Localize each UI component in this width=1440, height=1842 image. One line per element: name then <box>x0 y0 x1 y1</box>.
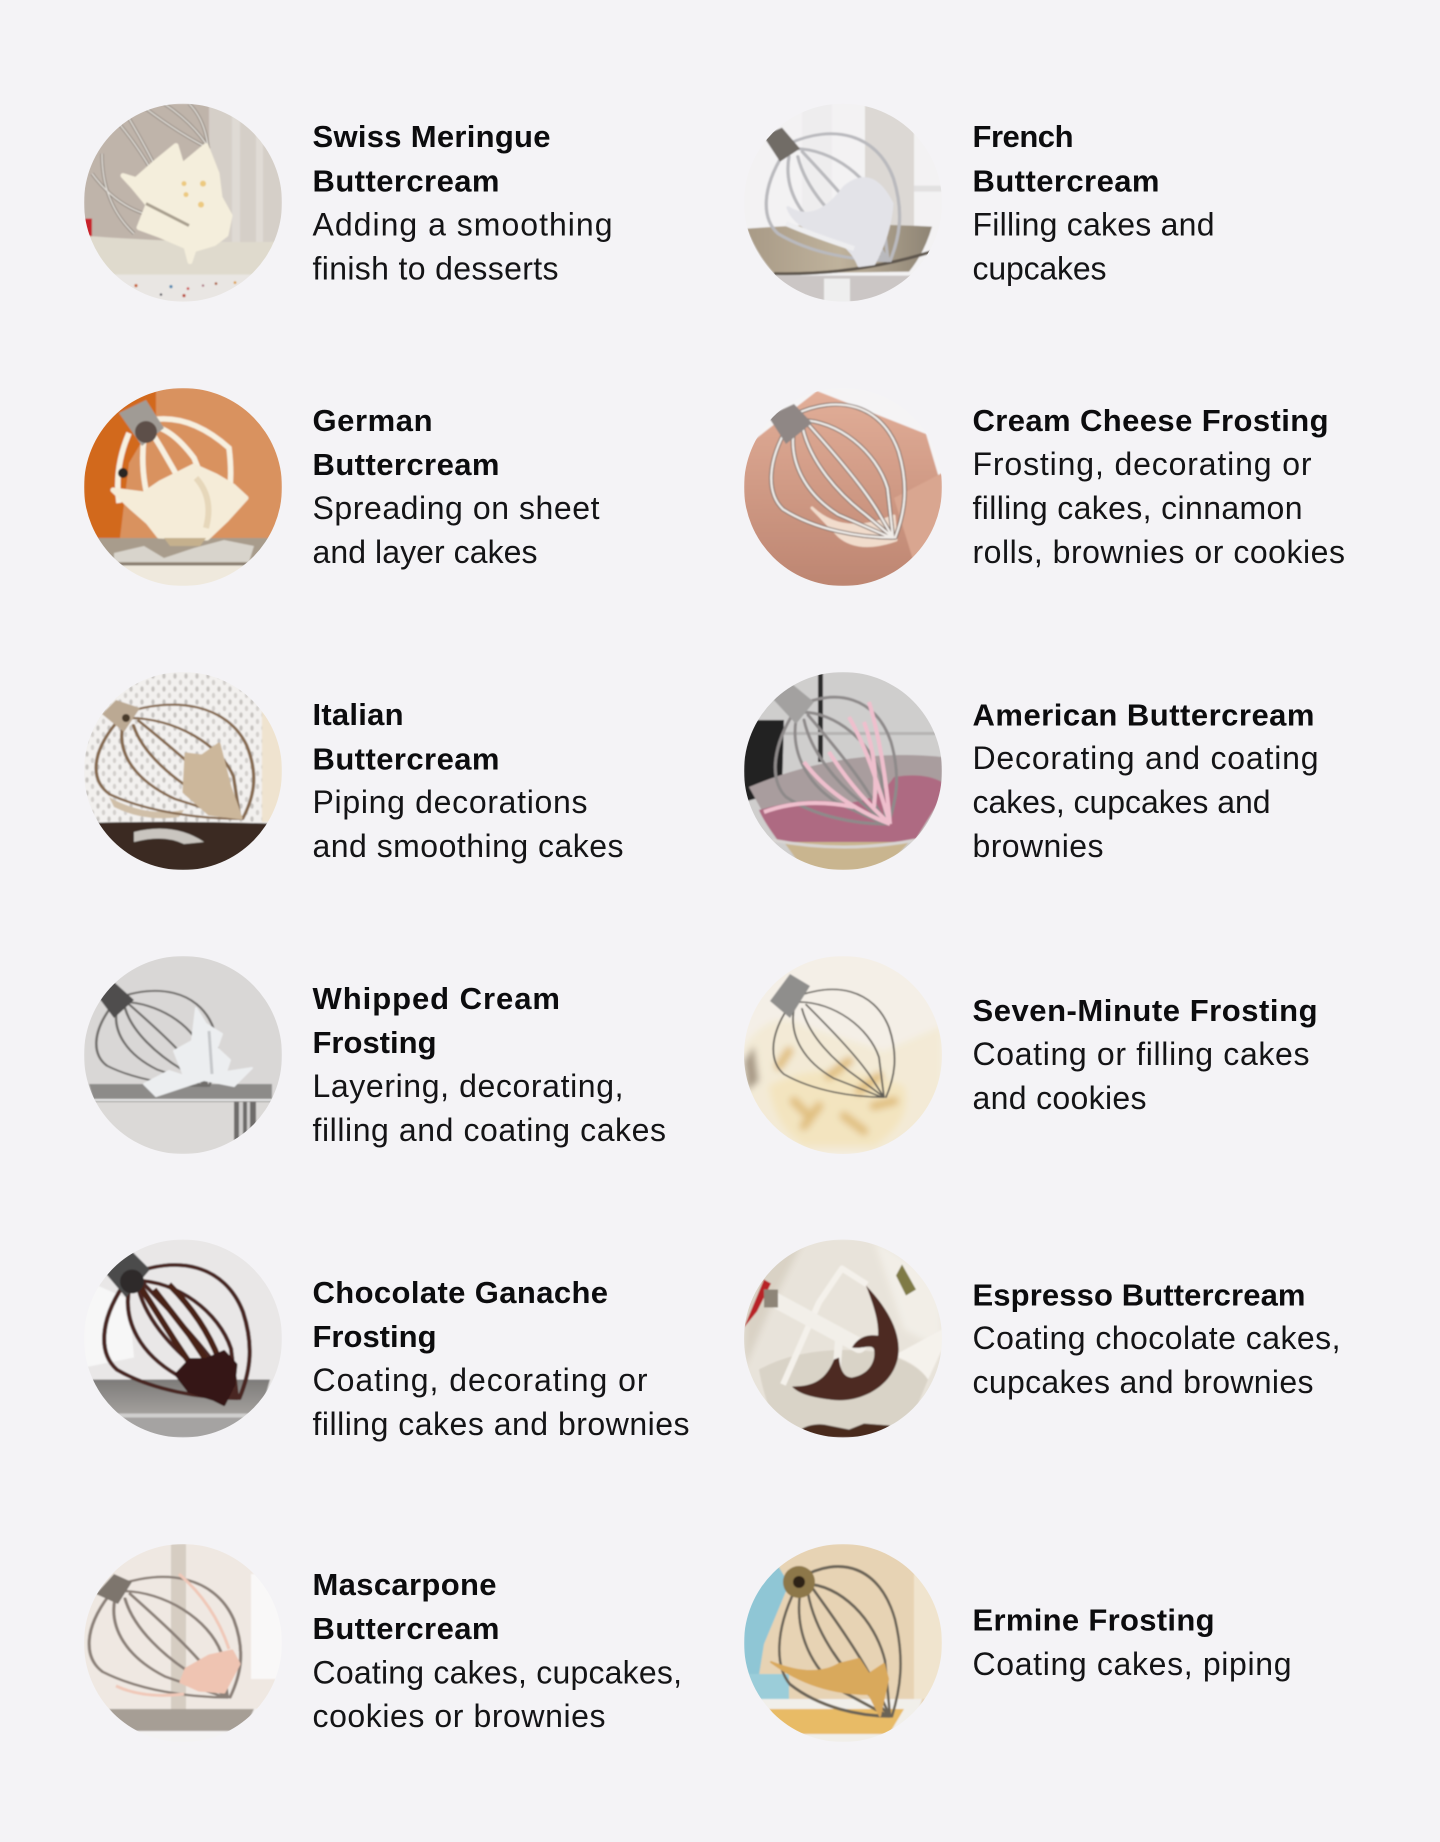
heading: Seven-Minute Frosting <box>972 993 1318 1028</box>
description: Coating cakes, cupcakes, <box>312 1654 682 1690</box>
description: Piping decorations <box>312 784 588 820</box>
photo: whisk with mascarpone buttercream <box>84 1544 282 1742</box>
description: Coating chocolate cakes, <box>972 1320 1340 1356</box>
heading: Whipped Cream <box>312 981 560 1016</box>
heading: Chocolate Ganache <box>312 1275 608 1310</box>
description <box>312 784 624 864</box>
photo: whisk with ermine frosting <box>744 1544 942 1742</box>
heading: Frosting <box>312 1319 436 1354</box>
description: rolls, brownies or cookies <box>972 534 1345 570</box>
description: Coating or filling cakes <box>972 1036 1310 1072</box>
description <box>312 206 612 286</box>
heading: Espresso Buttercream <box>972 1278 1306 1312</box>
description: and layer cakes <box>312 534 538 570</box>
item: American Buttercream <box>744 672 1318 870</box>
item: Seven-Minute Frosting <box>744 956 1318 1154</box>
description: filling cakes and brownies <box>312 1406 690 1442</box>
item: Chocolate Ganache Frosting <box>84 1240 690 1442</box>
heading: Ermine Frosting <box>972 1602 1214 1638</box>
photo: whisk with Swiss meringue buttercream <box>84 104 282 302</box>
photo: whisk with seven-minute frosting <box>744 956 942 1154</box>
heading: Buttercream <box>312 1611 500 1646</box>
heading: Cream Cheese Frosting <box>972 403 1328 438</box>
description <box>972 740 1318 864</box>
photo: paddle with espresso buttercream <box>744 1240 942 1438</box>
item: Mascarpone Buttercream <box>84 1544 682 1742</box>
description <box>312 1362 690 1442</box>
description <box>972 446 1345 570</box>
description: cakes, cupcakes and <box>972 784 1270 820</box>
heading <box>312 1275 608 1354</box>
item: Whipped Cream Frosting <box>84 956 666 1154</box>
heading: French <box>972 119 1074 154</box>
item: German Buttercream <box>84 388 600 586</box>
description <box>312 1654 682 1734</box>
item: Ermine Frosting <box>744 1544 1292 1742</box>
description: and cookies <box>972 1080 1146 1116</box>
photo: whisk with American buttercream <box>744 672 942 870</box>
heading: Buttercream <box>312 163 500 198</box>
photo: whisk with cream cheese frosting <box>744 388 942 586</box>
heading <box>312 119 550 198</box>
description <box>972 1036 1310 1116</box>
description: Layering, decorating, <box>312 1068 624 1104</box>
description <box>312 490 600 570</box>
heading: Buttercream <box>312 447 500 482</box>
description: Decorating and coating <box>972 740 1318 776</box>
description: Coating cakes, piping <box>972 1646 1292 1682</box>
description: Coating, decorating or <box>312 1362 648 1398</box>
item: Cream Cheese Frosting <box>744 388 1345 586</box>
description: Frosting, decorating or <box>972 446 1312 482</box>
description: filling cakes, cinnamon <box>972 490 1302 526</box>
heading <box>312 981 560 1060</box>
item: Espresso Buttercream <box>744 1240 1340 1438</box>
description: Spreading on sheet <box>312 490 600 526</box>
heading: Swiss Meringue <box>312 119 550 154</box>
heading <box>312 697 500 776</box>
heading <box>312 1567 500 1646</box>
heading: German <box>312 403 432 438</box>
description <box>972 1320 1340 1400</box>
description <box>312 1068 666 1148</box>
heading: American Buttercream <box>972 698 1314 732</box>
heading <box>312 403 500 482</box>
heading: Mascarpone <box>312 1567 496 1602</box>
heading: Buttercream <box>972 163 1160 198</box>
heading: Buttercream <box>312 741 500 776</box>
heading <box>972 119 1160 198</box>
photo: whisk with whipped cream frosting <box>84 956 282 1154</box>
photo: whisk with chocolate ganache <box>84 1240 282 1438</box>
heading: Frosting <box>312 1025 436 1060</box>
description: cookies or brownies <box>312 1698 606 1734</box>
photo: whisk with French buttercream <box>744 104 942 302</box>
description: cupcakes <box>972 250 1106 286</box>
photo: whisk with Italian buttercream <box>84 672 282 870</box>
item: Swiss Meringue Buttercream <box>84 104 612 302</box>
description: and smoothing cakes <box>312 828 624 864</box>
description: Filling cakes and <box>972 206 1214 242</box>
description <box>972 206 1214 286</box>
description: cupcakes and brownies <box>972 1364 1314 1400</box>
description: filling and coating cakes <box>312 1112 666 1148</box>
photo: whisk with German buttercream <box>84 388 282 586</box>
item: French Buttercream <box>744 104 1214 302</box>
item: Italian Buttercream <box>84 672 624 870</box>
description: Adding a smoothing <box>312 206 612 242</box>
heading: Italian <box>312 697 404 732</box>
description: brownies <box>972 828 1104 864</box>
description: finish to desserts <box>312 250 558 286</box>
